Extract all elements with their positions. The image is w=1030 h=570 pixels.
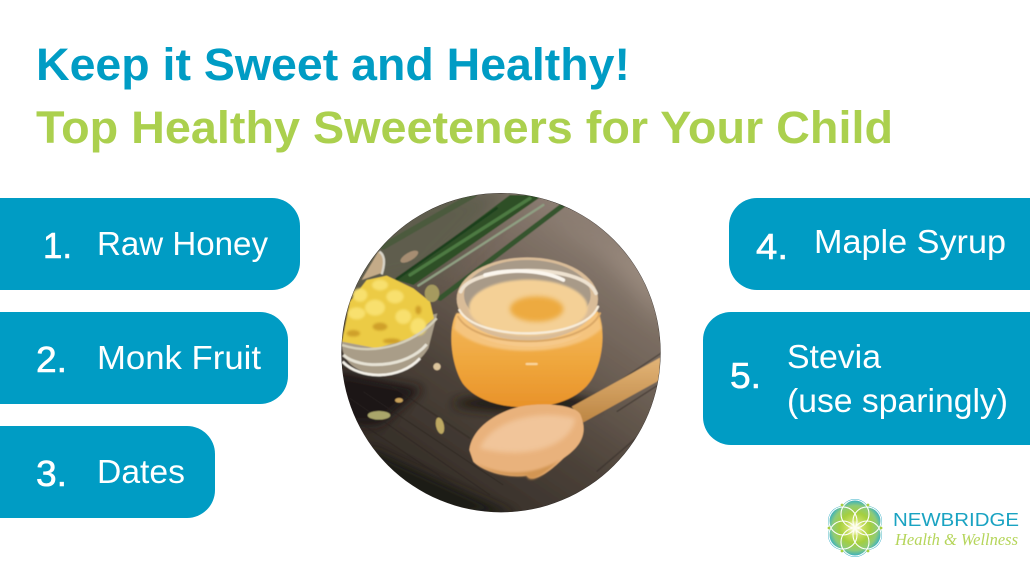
bowl filling: yellow crystals [342, 276, 434, 348]
crumbs [368, 248, 446, 435]
jar glass rim [457, 257, 598, 341]
back bowl [362, 252, 384, 280]
logo tagline: Health & Wellness [894, 530, 1018, 549]
list item 3: Dates [0, 426, 215, 518]
logo wordmark: NEWBRIDGE [893, 510, 1019, 530]
list item 2: Monk Fruit: 2. [36, 339, 67, 380]
jar honey body [451, 312, 603, 407]
list item 1: Raw Honey: 1. [43, 225, 72, 266]
green leaves [383, 195, 563, 298]
logo: Newbridge Health & Wellness [828, 499, 1019, 557]
list item 5: Stevia: 5. [730, 355, 761, 396]
list item 1: Raw Honey: Raw Honey [97, 225, 268, 262]
list item 3: Dates: Dates [97, 453, 185, 490]
title line 2: Top Healthy Sweeteners for Your Child [36, 102, 893, 153]
jar sugar paste surface [469, 280, 588, 336]
jar shadow [453, 394, 600, 413]
glass bowl [342, 313, 437, 374]
wooden board [337, 188, 667, 518]
list item 2: Monk Fruit: Monk Fruit [97, 339, 261, 376]
list item 5: Stevia [703, 312, 1030, 445]
list item 4: Maple Syrup [729, 198, 1030, 290]
wooden spoon [469, 358, 660, 479]
list item 4: Maple Syrup: Maple Syrup [814, 223, 1006, 260]
list item 2: Monk Fruit [0, 312, 288, 404]
list item 1: Raw Honey [0, 198, 300, 290]
list item 5: Stevia: (use sparingly) [787, 382, 1008, 419]
jar highlights [458, 271, 600, 364]
list item 3: Dates: 3. [36, 453, 67, 494]
title line 1: Keep it Sweet and Healthy! [36, 39, 630, 90]
list item 5: Stevia: Stevia [787, 338, 882, 375]
photo: honey jar, bowl and wooden spoon [337, 188, 667, 518]
logo mark: flower [828, 499, 882, 557]
list item 4: Maple Syrup: 4. [756, 226, 788, 267]
